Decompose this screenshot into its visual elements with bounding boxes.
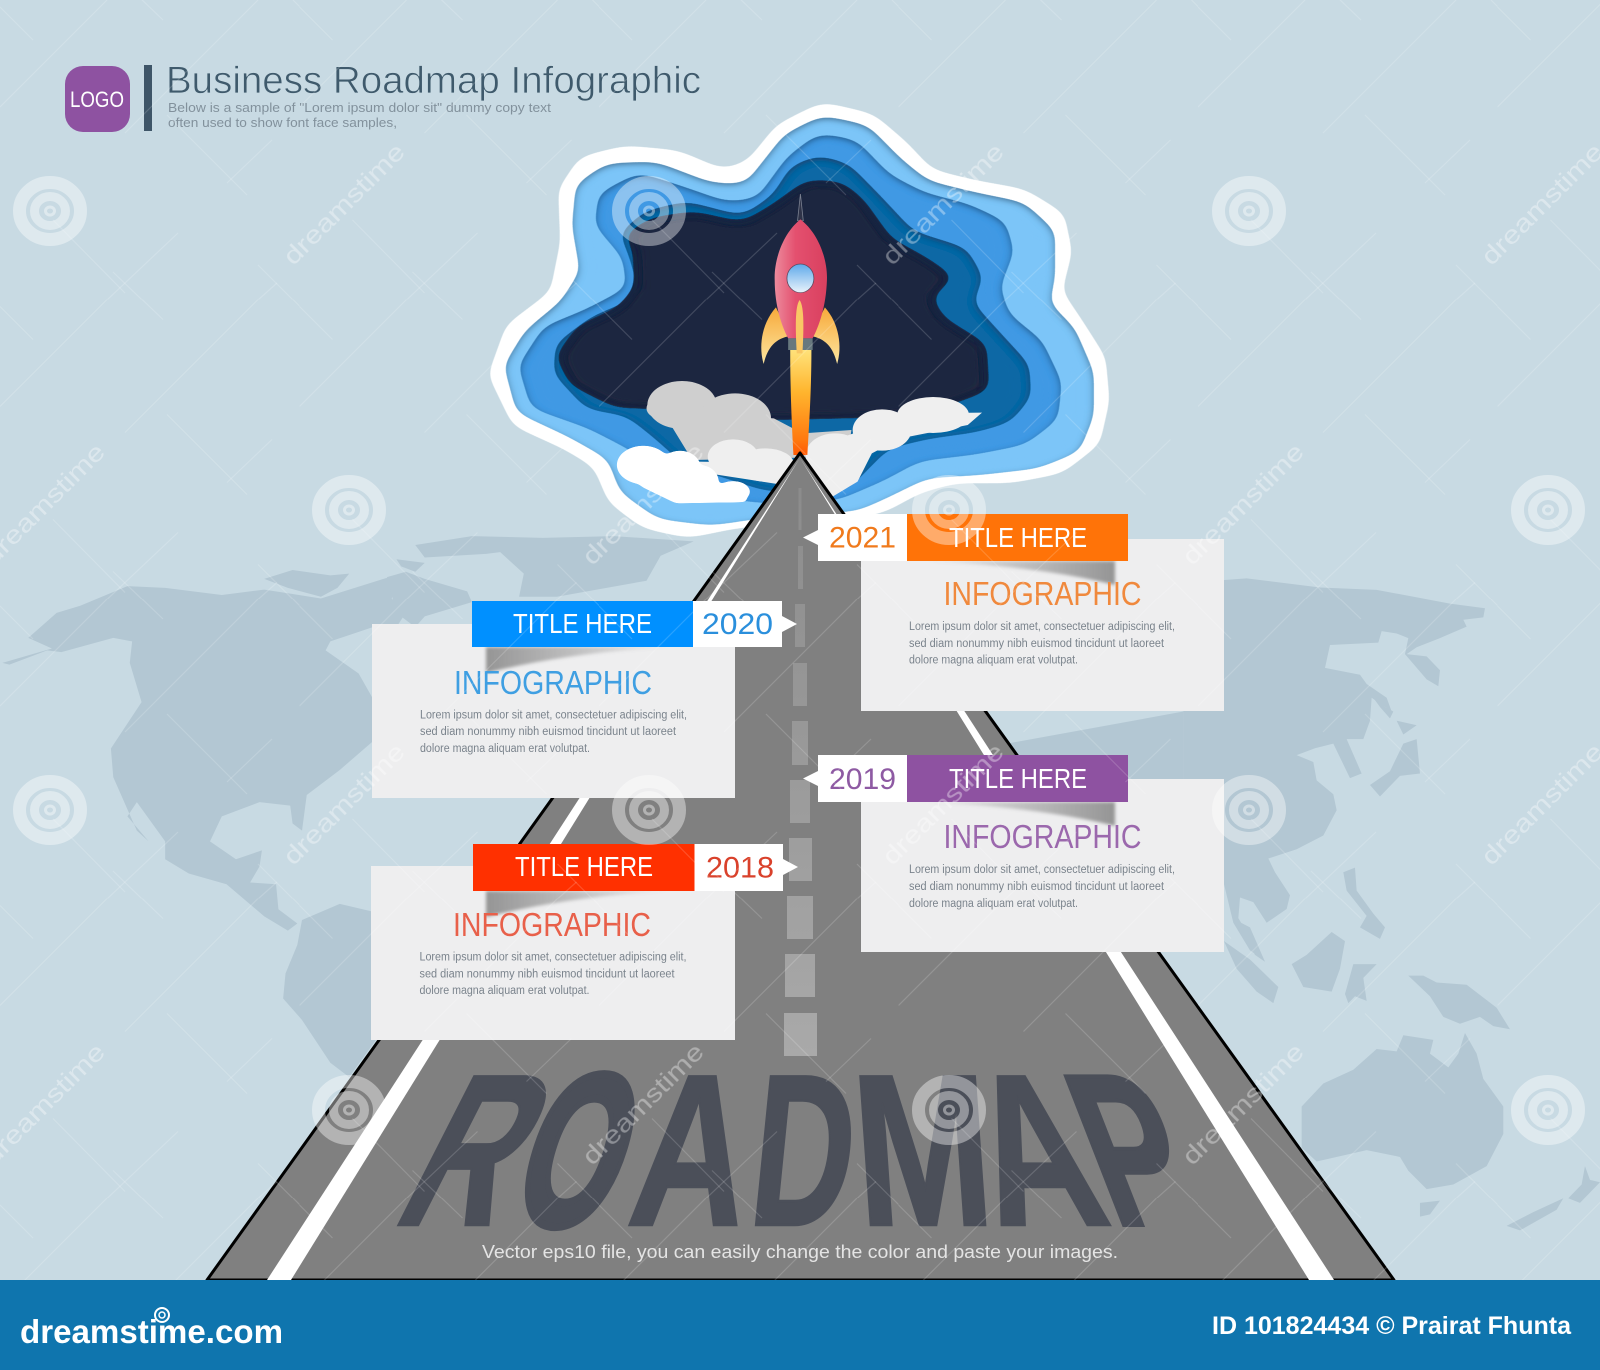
panel: 2021 [803,514,1224,711]
panel: 2019 [803,755,1224,952]
body text [420,710,687,755]
road surface [207,453,1394,1280]
watermark text: dreamstime [577,1038,710,1171]
watermark text: dreamstime [278,738,411,871]
year: 2021 [829,522,896,554]
title ribbon [472,601,693,647]
card [861,539,1224,711]
heading: INFOGRAPHIC [453,906,651,943]
year tag [803,755,907,802]
header [65,60,701,132]
logo text: LOGO [70,87,124,112]
watermark text: dreamstime [877,738,1010,871]
watermark text: dreamstime [1177,1038,1310,1171]
road lettering: ROADMAP: A [619,1031,766,1271]
logo badge [65,66,130,132]
ribbon title: TITLE HERE [949,763,1087,794]
title ribbon [907,755,1128,802]
body text: sed diam nonummy nibh euismod tincidunt ut laoreet [909,638,1165,650]
centre dashes [784,488,817,1056]
watermark text: dreamstime [278,138,411,271]
watermark text: dreamstime [1476,138,1600,271]
night sky [556,179,989,420]
body text [420,952,686,997]
body text: dolore magna aliquam erat volutpat. [420,985,590,997]
panel: 2018 [371,844,798,1040]
body text: Lorem ipsum dolor sit amet, consectetuer adipiscing elit, [909,621,1175,633]
road [207,453,1394,1280]
body text: Lorem ipsum dolor sit amet, consectetuer adipiscing elit, [909,864,1175,876]
ribbon shadow [921,802,1115,826]
mid blue layer [518,133,1062,504]
grey smoke cloud [647,381,851,460]
subtitle: often used to show font face samples, [168,115,397,130]
watermark text: dreamstime [877,138,1010,271]
year tag [693,601,797,647]
ribbon shadow [921,561,1115,585]
title ribbon [473,844,694,891]
light smoke cloud [696,397,982,500]
footer bar [0,1280,1600,1370]
header bar [144,65,152,131]
light blue layer [504,115,1094,526]
road lettering: ROADMAP: P [1038,1030,1224,1271]
year: 2019 [829,763,896,796]
footer credit: ID 101824434 © Prairat Fhunta [1212,1312,1572,1340]
watermark text: dreamstime [1177,438,1310,571]
body text: Lorem ipsum dolor sit amet, consectetuer adipiscing elit, [420,710,687,722]
rocket [761,194,840,455]
ribbon title: TITLE HERE [949,522,1087,553]
panel: 2020 [372,601,797,798]
heading: INFOGRAPHIC [944,818,1142,855]
card [371,866,735,1040]
year tag [694,844,798,891]
year tag [803,514,907,561]
card [372,624,735,798]
icon: brand spiral [155,1308,169,1322]
card [861,779,1224,952]
body text: Lorem ipsum dolor sit amet, consectetuer adipiscing elit, [420,952,686,964]
ribbon shadow [486,647,672,673]
white outer frame [488,102,1110,538]
year: 2018 [706,852,774,884]
world map [2,536,1600,1230]
watermark text [0,138,1600,1171]
road lettering: ROADMAP: O [492,1030,667,1272]
heading: INFOGRAPHIC [944,575,1142,612]
body text: sed diam nonummy nibh euismod tincidunt ut laoreet [420,968,675,980]
watermark text: dreamstime [1476,738,1600,871]
watermark text: dreamstime [577,438,710,571]
papercut cloud with rocket [488,102,1110,538]
subtitle [168,100,551,130]
body text [909,621,1175,666]
body text: sed diam nonummy nibh euismod tincidunt ut laoreet [909,881,1165,893]
watermark spirals [20,182,1578,1138]
body text [909,864,1175,910]
body text: dolore magna aliquam erat volutpat. [420,743,590,755]
deep blue layer [554,155,1031,491]
subtitle: Below is a sample of "Lorem ipsum dolor sit" dummy copy text [168,100,551,115]
road lettering: ROADMAP: R [365,1031,591,1272]
road lettering: ROADMAP [365,1029,1224,1272]
body text: dolore magna aliquam erat volutpat. [909,898,1078,910]
left lane line [267,458,800,1280]
footer brand: dreamstime.com [20,1313,283,1350]
title ribbon [907,514,1128,561]
year: 2020 [702,608,773,641]
body text: sed diam nonummy nibh euismod tincidunt ut laoreet [420,726,677,738]
white cloud [617,446,750,503]
body text: dolore magna aliquam erat volutpat. [909,654,1078,666]
title: Business Roadmap Infographic [166,60,701,102]
road caption: Vector eps10 file, you can easily change the color and paste your images. [482,1242,1118,1262]
ribbon shadow [486,891,672,917]
road lettering: ROADMAP: A [939,1029,1128,1271]
road lettering: ROADMAP: D [742,1030,867,1271]
ribbon title: TITLE HERE [513,608,652,639]
heading: INFOGRAPHIC [454,664,652,701]
ribbon title: TITLE HERE [515,851,653,882]
road lettering: ROADMAP: M [846,1029,1000,1271]
right lane line [800,458,1334,1280]
